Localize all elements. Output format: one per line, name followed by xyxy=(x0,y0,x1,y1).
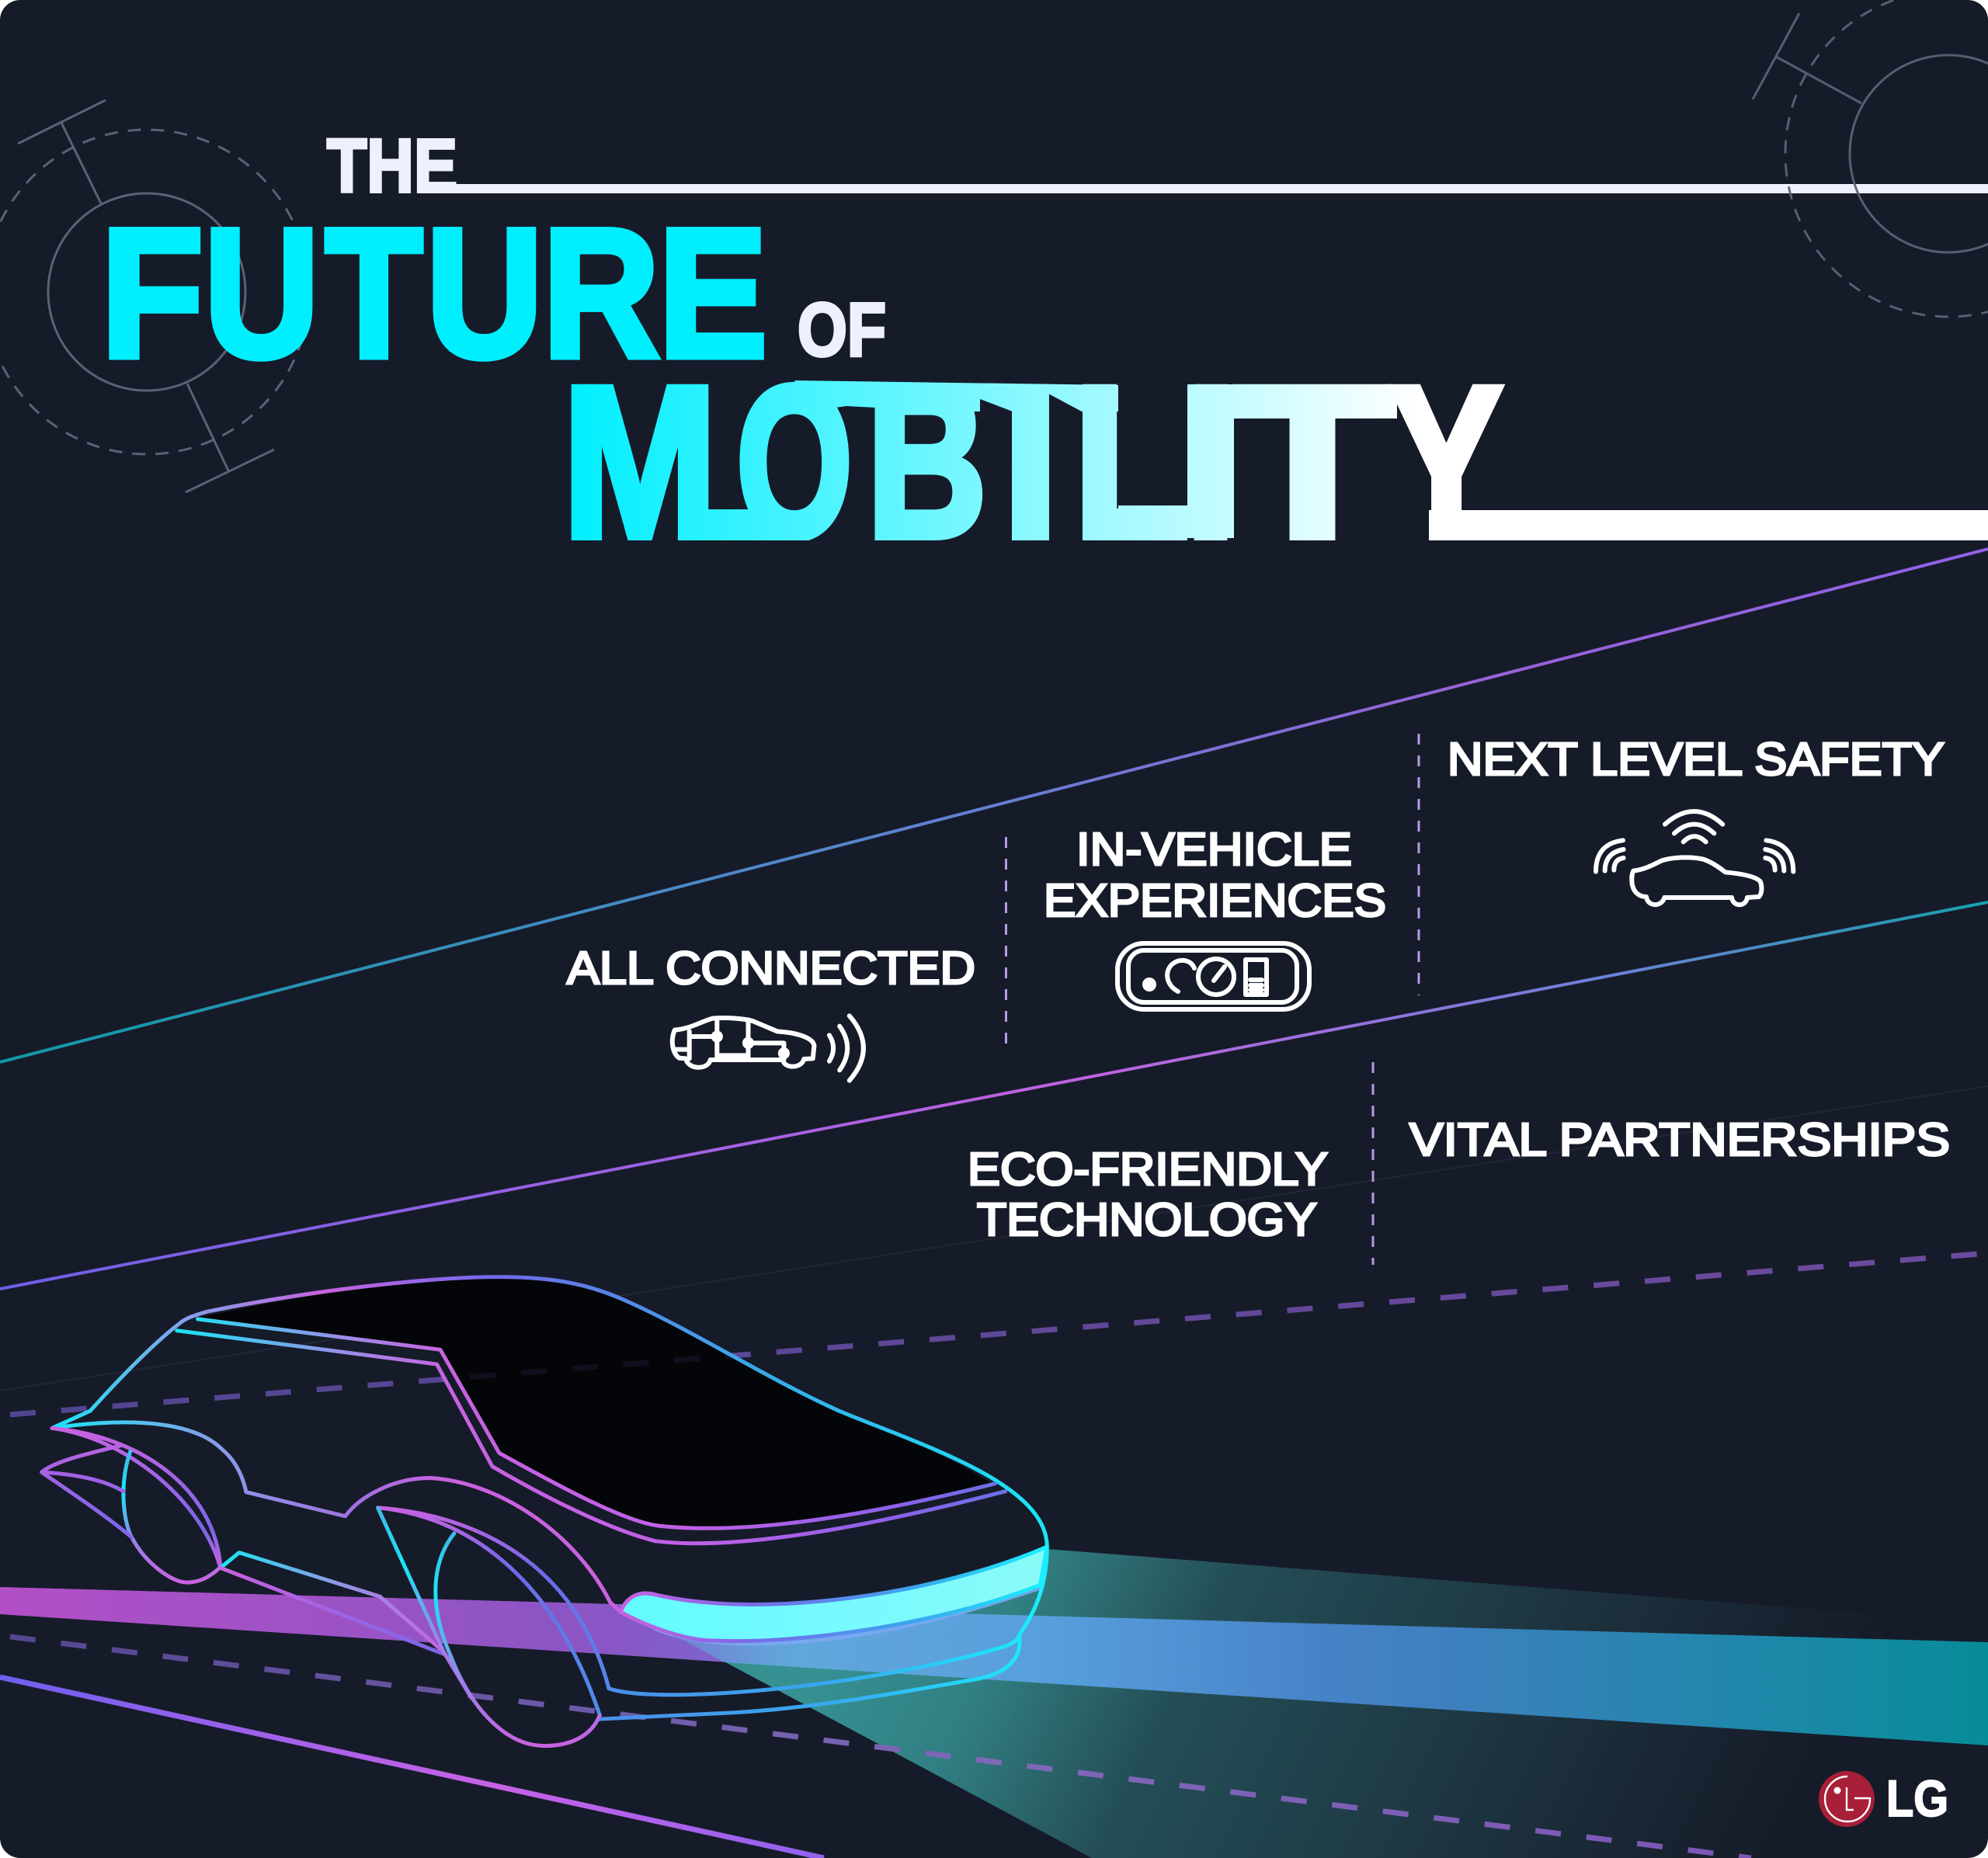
title: mobility: B xyxy=(867,341,987,582)
front strut xyxy=(378,1508,471,1698)
rear arch inner xyxy=(52,1428,221,1568)
window line lower xyxy=(177,1331,1006,1544)
car nose xyxy=(600,1547,1047,1719)
divider 2 xyxy=(1418,734,1420,995)
logo text: LG xyxy=(1886,1769,1948,1827)
headlight xyxy=(620,1547,1047,1641)
title: future: E xyxy=(659,191,767,396)
title: mobility: L xyxy=(1073,341,1190,582)
rear panel and front arch xyxy=(52,1422,620,1612)
label: experiences: EXPERIENCES xyxy=(1044,875,1386,926)
icon: connected car with waves xyxy=(673,1016,864,1081)
headlight beam xyxy=(617,1549,1988,1858)
icon: safety car with signals xyxy=(1596,811,1793,905)
road edge line xyxy=(0,1677,824,1858)
title: mobility: I xyxy=(1002,341,1059,582)
bumper line xyxy=(609,1635,1020,1695)
title: mobility: O xyxy=(736,341,853,582)
title: mobility xyxy=(572,380,1505,540)
logo mark xyxy=(1819,1771,1875,1827)
road dashes lower xyxy=(10,1637,1751,1858)
title: the: THE xyxy=(327,123,457,208)
title: future: R xyxy=(543,191,659,396)
LG logo xyxy=(1819,1769,1948,1827)
mobility underline xyxy=(1429,510,1988,540)
road dashes upper xyxy=(10,1253,1988,1415)
side sill xyxy=(221,1553,443,1652)
divider 1 xyxy=(1005,837,1007,1051)
decorative wheel top left xyxy=(0,100,309,492)
front wheel xyxy=(436,1533,600,1746)
car window xyxy=(201,1277,992,1528)
faint diagonal line xyxy=(0,1086,1988,1391)
divider 3 xyxy=(1371,1062,1375,1265)
car body outline xyxy=(52,1277,1047,1547)
headlight under glow xyxy=(652,1570,1044,1646)
title: future: F xyxy=(101,191,203,396)
title: mobility: I xyxy=(1185,341,1236,582)
title: future: T xyxy=(325,191,422,396)
diagonal line upper xyxy=(0,549,1988,1062)
title: mobility: M xyxy=(562,341,718,582)
icon: in-vehicle dashboard xyxy=(1117,943,1309,1009)
label: in-vehicle: IN-VEHICLE xyxy=(1076,824,1352,875)
front wheel arch xyxy=(378,1508,609,1689)
title bar line xyxy=(425,184,1988,193)
label: technology: TECHNOLOGY xyxy=(977,1194,1317,1245)
rear arch xyxy=(52,1428,221,1568)
title: future: U xyxy=(204,191,319,396)
title: future: U xyxy=(426,191,543,396)
label: all connected: ALL CONNECTED xyxy=(567,943,975,994)
tail xyxy=(42,1446,132,1537)
rear wheel xyxy=(123,1451,221,1582)
label: next level safety: NEXT LEVEL SAFETY xyxy=(1448,734,1945,785)
title: future xyxy=(101,191,767,396)
side sill lower xyxy=(221,1568,443,1654)
title: of: OF xyxy=(798,287,886,372)
label: vital partnerships: VITAL PARTNERSHIPS xyxy=(1409,1114,1950,1165)
beam over road band xyxy=(617,1604,1553,1717)
window line xyxy=(197,1319,995,1528)
title: mobility: Y xyxy=(1390,341,1503,582)
road band xyxy=(0,1587,1988,1745)
front wheel arch inner xyxy=(378,1508,600,1715)
title: mobility: T xyxy=(1235,341,1390,582)
label: eco-friendly: ECO-FRIENDLY xyxy=(968,1144,1328,1195)
car illustration xyxy=(42,1277,1047,1746)
decorative wheel top right xyxy=(1753,0,1988,317)
diagonal line lower xyxy=(0,902,1988,1289)
